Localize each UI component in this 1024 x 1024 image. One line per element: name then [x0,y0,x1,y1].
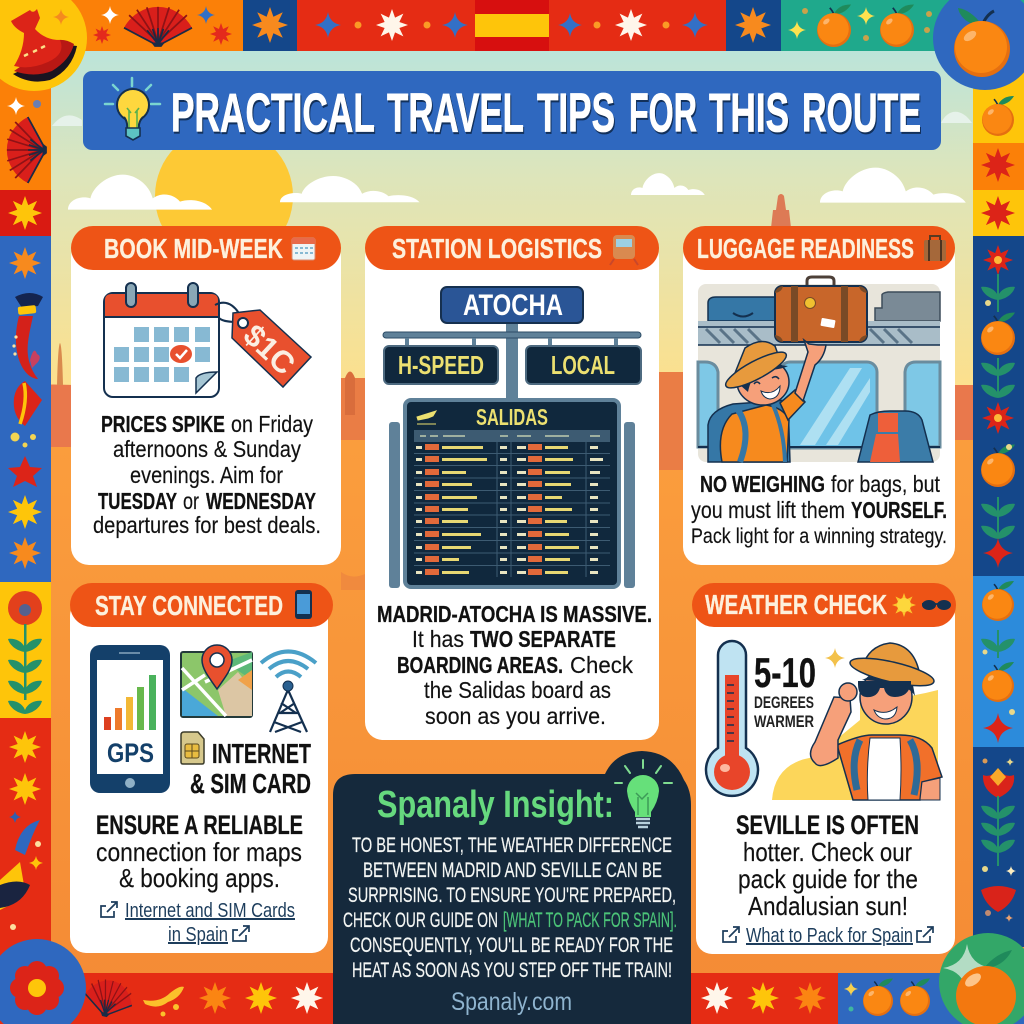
label: 5-10 degrees warmer [754,649,816,731]
heading: stay connected [70,583,333,627]
label: 5-10 degrees warmer: WARMER [754,712,814,731]
text: insight body: CONSEQUENTLY, YOU'LL BE READY FOR THE [350,934,673,957]
clouds [52,112,972,210]
icon: sim card [181,732,204,764]
text: prices spike: evenings. Aim for [130,462,283,488]
text: no weighing: for bags, but [831,471,941,497]
text: no weighing: YOURSELF. [851,497,947,523]
icon: phone with signal bars: GPS [107,738,154,768]
text: madrid-atocha: Check [570,652,633,678]
icon: phone with signal bars [90,645,170,793]
text: prices spike: departures for best deals. [93,512,321,538]
website: Spanaly.com [451,988,572,1016]
label: 5-10 degrees warmer: 5-10 [754,649,816,696]
heading: weather check: WEATHER CHECK [705,589,887,620]
heading: weather check [692,583,956,627]
border: top [0,0,1024,51]
text: insight body: SURPRISING. TO ENSURE YOU'RE PREPARED, [348,884,676,907]
text: seville is often: SEVILLE IS OFTEN [736,810,919,840]
text: madrid-atocha: the Salidas board as [424,677,611,703]
text: madrid-atocha: TWO SEPARATE [470,626,616,652]
text: no weighing: Pack light for a winning strategy. [691,525,947,548]
text: no weighing: NO WEIGHING [700,471,825,497]
heading: station logistics: STATION LOGISTICS [392,233,602,264]
icon: thermometer [706,641,758,796]
heading: stay connected: STAY CONNECTED [95,590,283,621]
text: seville is often: hotter. Check our [743,837,912,867]
text: insight body [343,834,677,982]
title text: TRAVEL [387,82,524,144]
text: prices spike [93,411,321,538]
text: madrid-atocha: It has [412,626,464,652]
text: seville is often: pack guide for the [738,864,918,894]
heading: book mid-week: BOOK MID-WEEK [104,233,283,264]
distant tower [771,194,791,228]
link: internet and sim cards in spain: Internet and SIM Cards [125,900,295,922]
text: prices spike: on Friday [231,411,313,437]
panel: weather check [692,583,956,954]
corner: orange bottom right [939,933,1024,1024]
label: 5-10 degrees warmer: DEGREES [754,693,814,712]
text: insight body: [WHAT TO PACK FOR SPAIN]. [503,909,677,932]
label: internet and sim card: & SIM CARD [190,768,311,799]
text: no weighing: you must lift them [691,497,845,523]
text: ensure a reliable [96,810,303,893]
icon: calendar with price tag [104,283,311,397]
corner: orange top right [933,0,1024,90]
heading: luggage readiness: LUGGAGE READINESS [697,233,914,264]
departures board: SALIDAS [476,404,548,430]
link: what to pack for spain: What to Pack for Spain [746,925,913,947]
text: no weighing [691,471,947,548]
text: prices spike: PRICES SPIKE [101,411,225,437]
text: prices spike: or [183,488,199,514]
text: ensure a reliable: connection for maps [96,837,302,867]
text: madrid-atocha: MADRID-ATOCHA IS MASSIVE. [377,601,652,627]
text: seville is often: Andalusian sun! [748,891,908,921]
title text: PRACTICAL [171,82,375,144]
heading: luggage readiness [683,226,955,270]
station signs: H-SPEED [398,350,484,380]
panel: station logistics [365,226,659,740]
icon: signal tower [261,652,316,732]
title text: TIPS [537,82,615,144]
link: internet and sim cards in spain: in Spain [168,924,228,946]
text: ensure a reliable: & booking apps. [119,863,280,893]
icon: light bulb [105,78,160,140]
heading: spanaly insight: Spanaly Insight: [377,784,614,826]
icon: map with pin [181,645,252,717]
title text: FOR [629,82,697,144]
border: bottom [0,973,1024,1024]
panel: book mid-week [71,226,341,565]
text: prices spike: WEDNESDAY [206,488,316,514]
text: prices spike: TUESDAY [98,488,177,514]
station signs [383,287,641,588]
text: prices spike: afternoons & Sunday [113,436,301,462]
title text: ROUTE [802,82,921,144]
sun [155,127,293,265]
text: insight body: TO BE HONEST, THE WEATHER DIFFERENCE [352,834,672,857]
title text: THIS [709,82,789,144]
heading: station logistics [365,226,659,270]
text: ensure a reliable: ENSURE A RELIABLE [96,810,303,840]
panel: spanaly insight [333,751,691,1024]
departures board [405,400,619,587]
title banner [83,71,941,150]
corner: flamenco dress [0,0,87,91]
border: right [973,51,1024,947]
link: internet and sim cards in spain [101,900,295,946]
text: madrid-atocha: soon as you arrive. [425,703,606,729]
text: insight body: CHECK OUR GUIDE ON [343,909,498,932]
station signs: LOCAL [551,350,615,380]
desert ground [0,343,1024,1024]
icon: calendar with price tag: $1C [237,317,302,382]
label: internet and sim card [190,738,311,799]
text: madrid-atocha: BOARDING AREAS. [397,652,563,678]
icon: green bulb [615,760,672,827]
text: insight body: HEAT AS SOON AS YOU STEP OFF THE TRAIN! [352,959,672,982]
panel: luggage readiness [683,226,955,565]
text: seville is often [736,810,919,921]
border: left [0,51,51,974]
illustration: traveler lifting suitcase [698,277,940,462]
text: madrid-atocha [377,601,652,729]
panel: stay connected [70,583,333,953]
corner: flower bottom left [0,939,86,1024]
label: internet and sim card: INTERNET [212,738,311,769]
title text [171,82,921,144]
text: insight body: BETWEEN MADRID AND SEVILLE CAN BE [363,859,662,882]
illustration: traveler with sunglasses [772,643,942,800]
heading: book mid-week [71,226,341,270]
station signs: ATOCHA [463,289,563,322]
sky background [0,0,1024,390]
